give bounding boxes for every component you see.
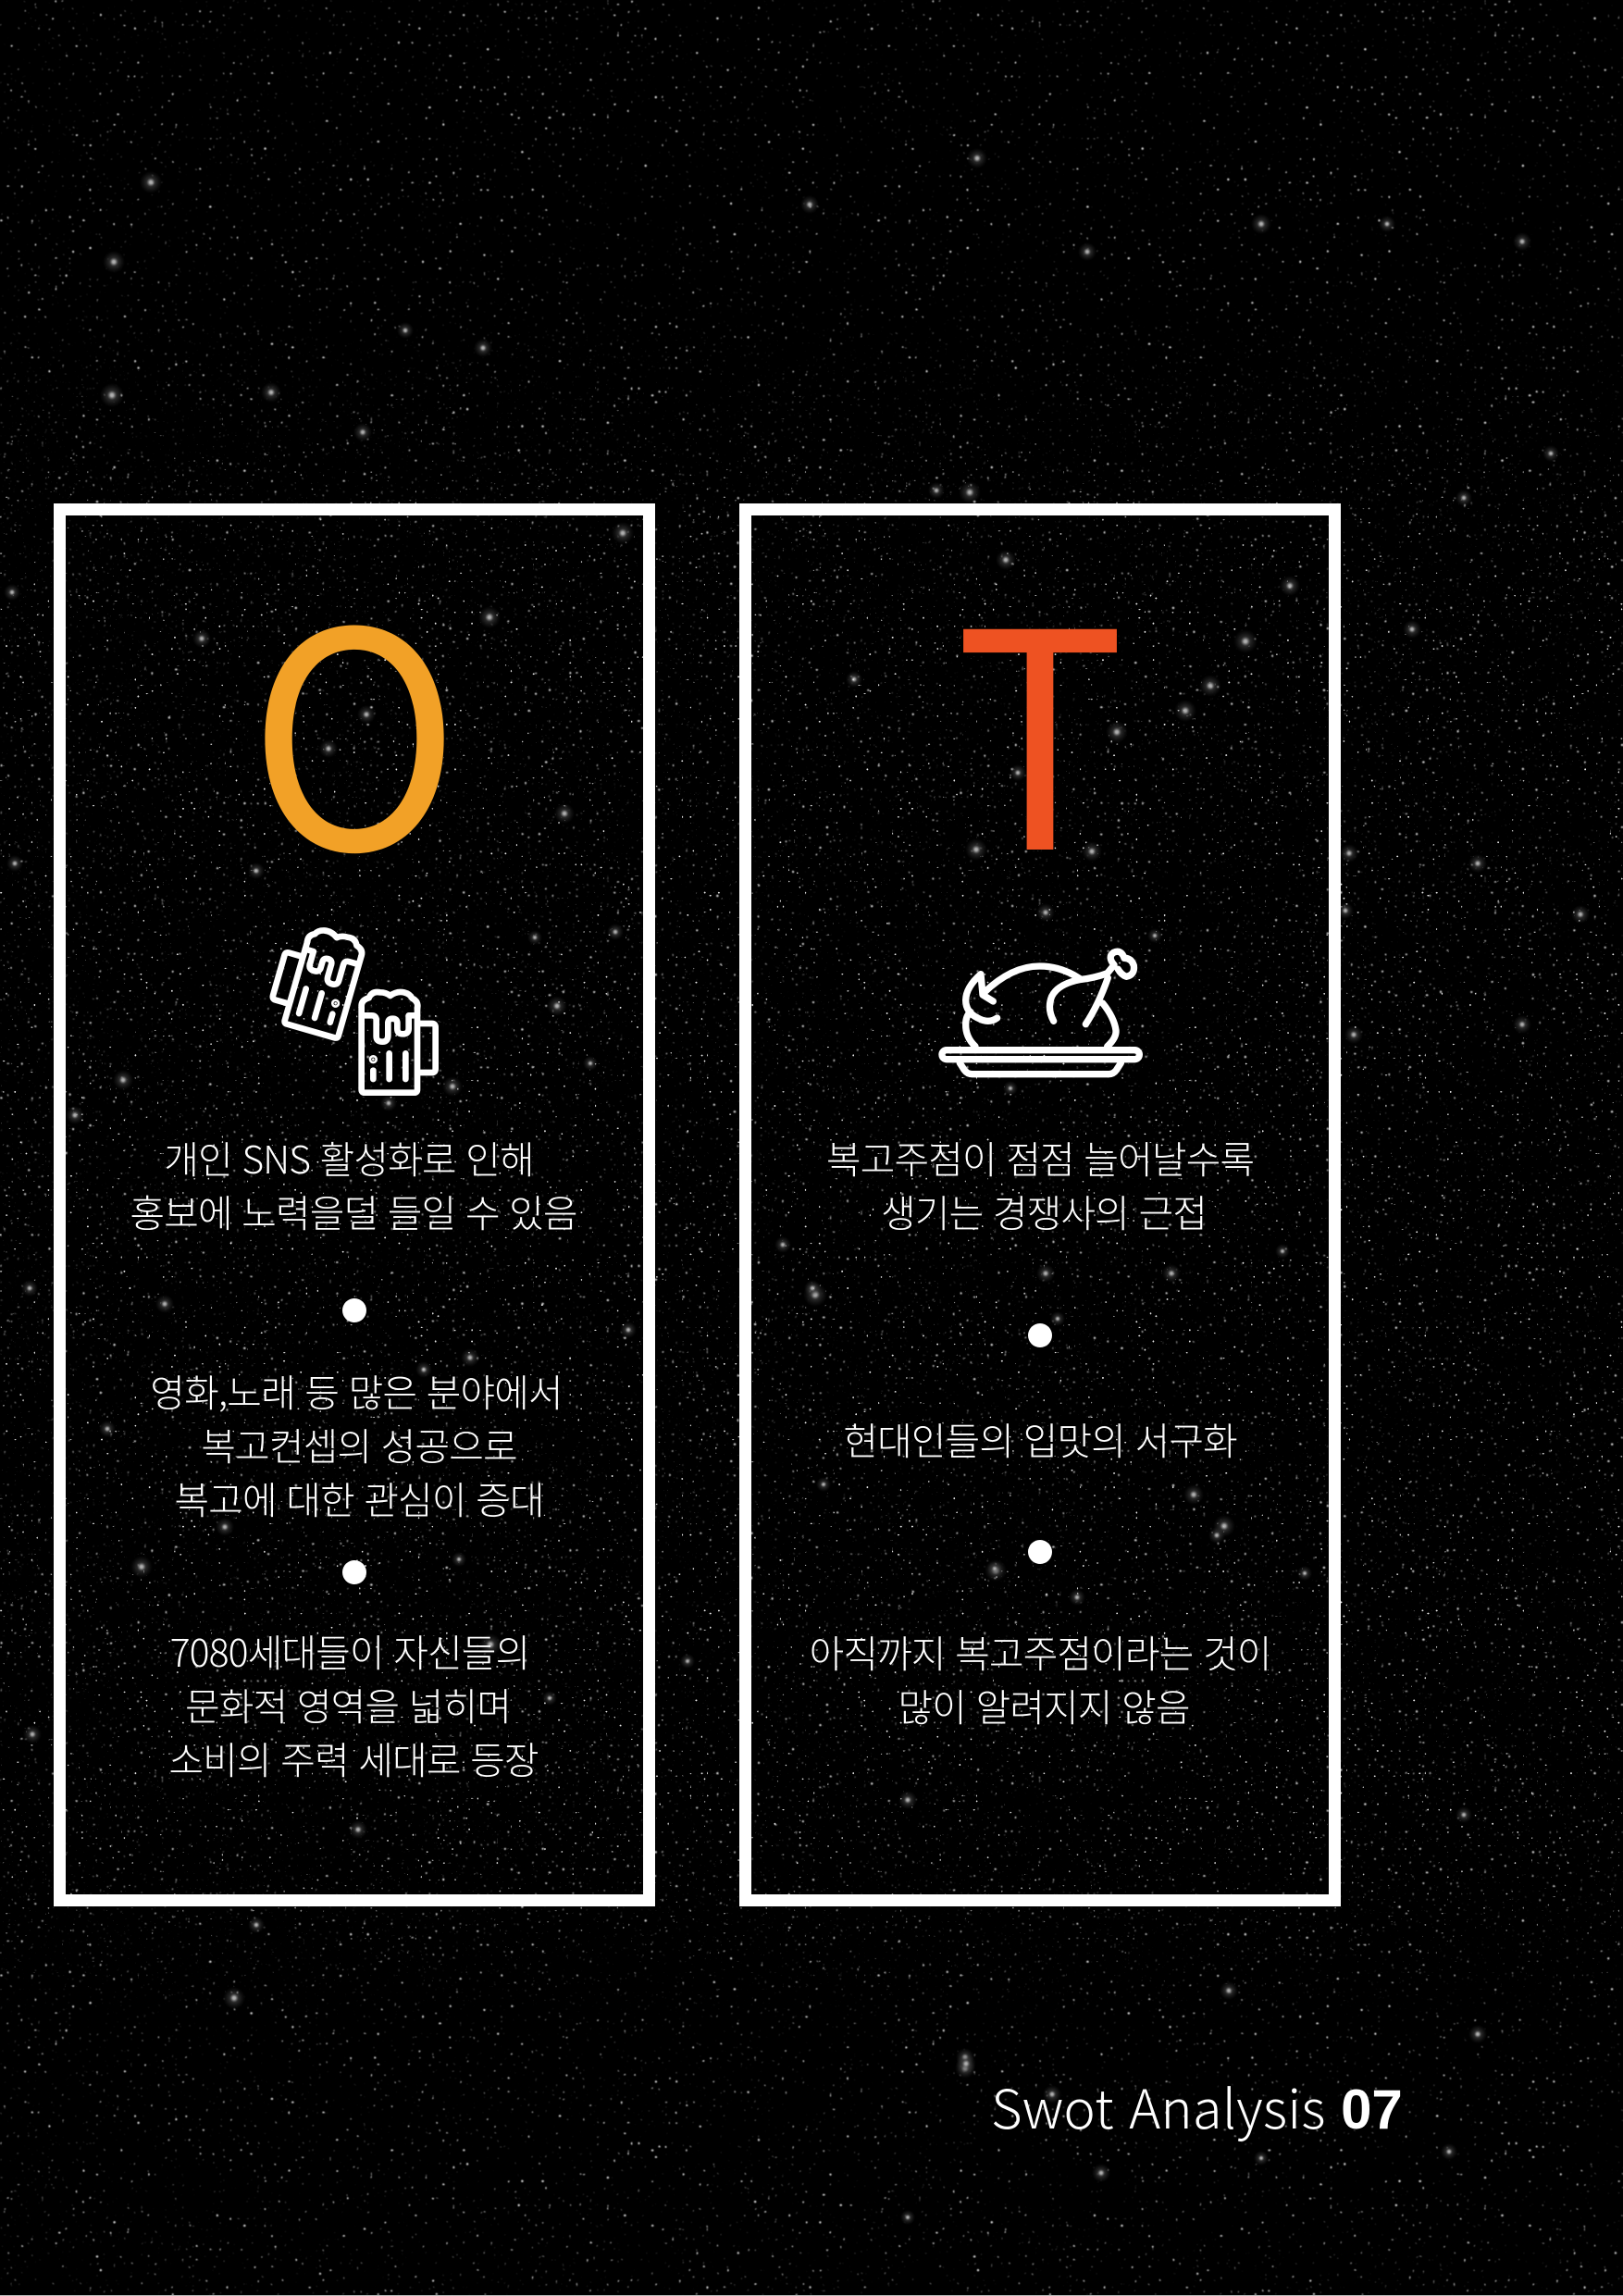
text: opportunity 3 — [168, 1622, 539, 1785]
text: threat 1: 복고주점이 점점 늘어날수록 — [826, 1129, 1254, 1185]
panel: opportunities — [54, 501, 655, 1906]
text: opportunity 1: 개인 SNS 활성화로 인해 — [164, 1129, 534, 1185]
text: threat 3: 아직까지 복고주점이라는 것이 — [809, 1623, 1271, 1679]
heading letter T: T — [955, 501, 1125, 937]
text: threat 1 — [826, 1129, 1254, 1238]
icon: beer mugs — [270, 927, 439, 1096]
bullet dot — [342, 1560, 366, 1584]
panel frame O — [54, 503, 655, 1906]
text: opportunity 2 — [150, 1362, 563, 1525]
text: opportunity 2: 복고컨셉의 성공으로 — [201, 1416, 517, 1471]
text: opportunity 3: 소비의 주력 세대로 등장 — [168, 1730, 539, 1785]
panel: threats — [739, 501, 1341, 1906]
text: opportunity 3: 7080세대들이 자신들의 — [170, 1622, 529, 1678]
panel frame T — [739, 503, 1341, 1906]
bullet dot — [1028, 1323, 1052, 1347]
text: opportunity 2: 영화,노래 등 많은 분야에서 — [150, 1362, 563, 1418]
text: threat 3 — [809, 1623, 1271, 1732]
bullet dot — [342, 1298, 366, 1322]
footer: page title: Swot Analysis 07 — [991, 2066, 1403, 2144]
text: opportunity 2: 복고에 대한 관심이 증대 — [174, 1470, 544, 1525]
text: opportunity 1 — [130, 1129, 577, 1238]
text: opportunity 3: 문화적 영역을 넓히며 — [185, 1676, 511, 1731]
text: threat 2: 현대인들의 입맛의 서구화 — [843, 1410, 1237, 1466]
bullet dot — [1028, 1540, 1052, 1564]
text: threat 3: 많이 알려지지 않음 — [898, 1677, 1190, 1732]
text: opportunity 1: 홍보에 노력을덜 들일 수 있음 — [130, 1183, 577, 1238]
icon: roast chicken on plate — [938, 948, 1143, 1077]
text: threat 1: 생기는 경쟁사의 근접 — [881, 1183, 1207, 1238]
heading letter O: O — [248, 501, 461, 937]
